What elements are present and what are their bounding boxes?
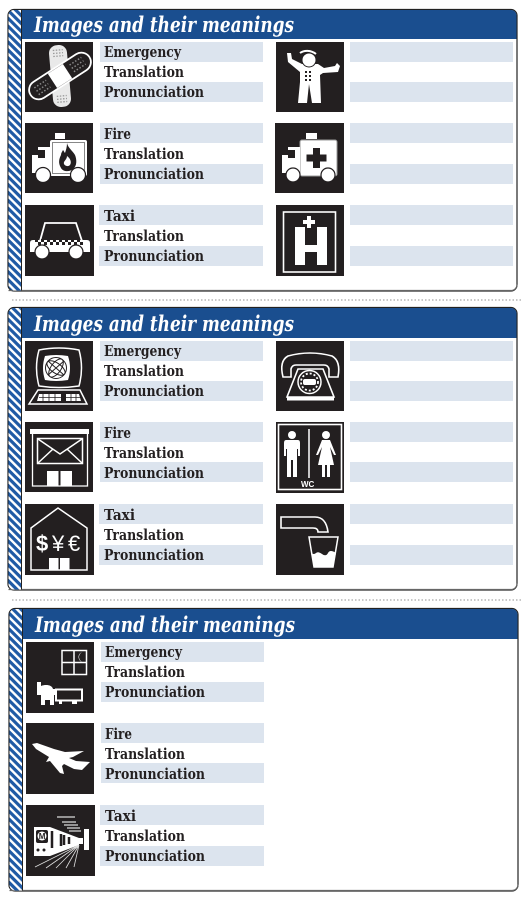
text rows: emergency: Pronunciation: [104, 84, 204, 101]
text rows: fire: Pronunciation: [104, 465, 204, 482]
text rows: taxi: Pronunciation: [104, 547, 204, 564]
text rows: fire: Fire: [105, 726, 132, 743]
text rows: taxi: [100, 805, 264, 866]
heading: Images and their meanings: [33, 12, 294, 37]
icon: bandages: [25, 42, 95, 112]
icon: subway train: M: [39, 832, 46, 841]
heading: Images and their meanings: [33, 311, 294, 336]
text rows: fire: Translation: [104, 146, 184, 163]
text rows: emergency: [100, 42, 263, 102]
answer rows: ambulance: [350, 123, 513, 184]
icon: post office: [25, 422, 93, 492]
text rows: fire: Translation: [105, 746, 185, 763]
text rows: emergency: Emergency: [104, 44, 181, 61]
text rows: taxi: Pronunciation: [105, 848, 205, 865]
text rows: taxi: Taxi: [104, 208, 135, 225]
text rows: emergency: Emergency: [104, 343, 181, 360]
text rows: taxi: [99, 504, 263, 565]
text rows: taxi: [99, 205, 263, 266]
header bar: [23, 609, 518, 639]
icon: currency exchange: $: [36, 531, 48, 556]
icon: hospital: [276, 205, 344, 276]
header bar: [22, 10, 516, 39]
icon: telephone: [276, 341, 344, 411]
icon: fire truck: [25, 123, 93, 193]
icon: restrooms: WC: [301, 480, 315, 489]
icon: drinking water tap: [276, 504, 344, 575]
text rows: emergency: Emergency: [105, 644, 182, 661]
answer rows: telephone: [350, 341, 513, 401]
text rows: taxi: Translation: [104, 228, 184, 245]
text rows: emergency: Translation: [104, 363, 184, 380]
text rows: emergency: Pronunciation: [104, 383, 204, 400]
text rows: emergency: Translation: [105, 664, 185, 681]
text rows: emergency: [101, 642, 264, 702]
text rows: fire: [101, 723, 264, 783]
icon: subway train: [26, 805, 95, 876]
text rows: fire: [100, 123, 263, 184]
icon: ambulance: [275, 123, 344, 193]
text rows: taxi: Pronunciation: [104, 248, 204, 265]
icon: currency exchange: €: [68, 531, 80, 556]
icon: hotel bed and window: [26, 642, 94, 713]
text rows: taxi: Translation: [105, 828, 185, 845]
icon: traffic police officer: [276, 42, 344, 112]
text rows: taxi: Taxi: [105, 808, 136, 825]
text rows: emergency: Pronunciation: [105, 684, 205, 701]
text rows: taxi: Taxi: [104, 507, 135, 524]
icon: restrooms: [276, 422, 344, 493]
text rows: fire: [100, 422, 263, 482]
answer rows: hospital: [350, 205, 513, 266]
answer rows: police: [350, 42, 513, 102]
text rows: emergency: Translation: [104, 64, 184, 81]
icon: currency exchange: ¥: [51, 531, 65, 556]
text rows: fire: Pronunciation: [104, 166, 204, 183]
icon: computer with globe: [25, 341, 93, 411]
header bar: [22, 308, 516, 338]
answer rows: tap: [350, 504, 513, 565]
text rows: fire: Pronunciation: [105, 766, 205, 783]
icon: taxi: [25, 205, 94, 276]
text rows: fire: Fire: [104, 425, 131, 442]
answer rows: restrooms: [350, 422, 513, 482]
icon: currency exchange: [25, 504, 94, 575]
panel: images and their meanings, set 2: [8, 308, 517, 590]
icon: airplane: [26, 723, 94, 794]
heading: Images and their meanings: [34, 612, 295, 637]
text rows: fire: Translation: [104, 445, 184, 462]
panel: images and their meanings, set 3: [9, 608, 518, 891]
text rows: fire: Fire: [104, 126, 131, 143]
panel: images and their meanings, set 1: [8, 10, 517, 291]
text rows: taxi: Translation: [104, 527, 184, 544]
text rows: emergency: [100, 341, 263, 401]
